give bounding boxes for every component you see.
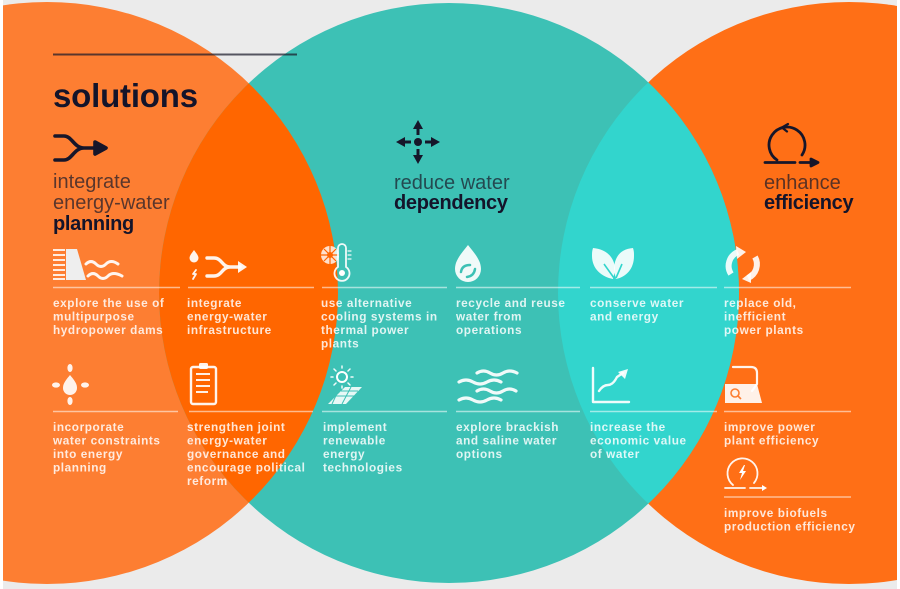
title: solutions: [53, 77, 198, 114]
panel: energy-water infrastructure: energy-water: [187, 310, 267, 324]
icon: merging arrows: [55, 136, 106, 160]
heading: enhance efficiency: efficiency: [764, 192, 854, 214]
panel: renewable energy: implement: [323, 420, 387, 434]
panel: alternative cooling: thermal power: [321, 323, 409, 337]
panel: power plant efficiency: improve power: [724, 420, 815, 434]
heading: enhance efficiency: enhance: [764, 172, 841, 194]
icon: drop, bolt and merging arrows: [190, 250, 247, 279]
panel: joint governance: governance and: [187, 447, 286, 461]
panel: recycle and reuse: water from: [455, 310, 522, 324]
panel: economic value of water: economic value: [590, 434, 687, 448]
heading: reduce water dependency: reduce water: [394, 172, 510, 194]
panel: joint governance: [187, 363, 313, 488]
overlap: left and middle: [159, 83, 338, 503]
panel: brackish and saline water: [456, 371, 580, 461]
panel: brackish and saline water: options: [456, 447, 503, 461]
icon: dam: [53, 249, 122, 280]
panel: conserve water and energy: and energy: [590, 310, 659, 324]
panel: recycle and reuse: operations: [456, 323, 522, 337]
panel: joint governance: encourage political: [187, 460, 306, 474]
panel: conserve water and energy: [590, 248, 717, 324]
panel: alternative cooling: [321, 244, 447, 350]
panel: water constraints: water constraints: [52, 434, 161, 448]
panel: replace old plants: [724, 246, 851, 337]
panel: brackish and saline water: and saline water: [456, 434, 557, 448]
icon: leaves: [592, 248, 634, 279]
heading: reduce water dependency: [394, 172, 510, 214]
panel: hydropower dams: [53, 249, 180, 337]
panel: replace old plants: inefficient: [724, 310, 786, 324]
panel: replace old plants: power plants: [724, 323, 804, 337]
panel: economic value of water: [590, 368, 717, 461]
icon: sun and solar panel: [328, 366, 362, 404]
icon: drop with four points: [52, 364, 89, 405]
panel: joint governance: energy-water: [187, 434, 267, 448]
panel: biofuels production efficiency: [724, 458, 855, 534]
icon: power plant: [725, 367, 762, 403]
panel: renewable energy: [322, 366, 447, 474]
icon: loop arrow: [765, 124, 818, 166]
panel: energy-water infrastructure: integrate: [187, 296, 242, 310]
heading: integrate energy-water planning: integrate: [53, 171, 131, 193]
top rule: [53, 54, 297, 56]
panel: replace old plants: replace old,: [724, 296, 797, 310]
panel: water constraints: incorporate: [53, 420, 124, 434]
panel: renewable energy: technologies: [323, 460, 403, 474]
panel: renewable energy: energy: [323, 447, 365, 461]
panel: energy-water infrastructure: infrastructure: [187, 323, 272, 337]
circle: left: [3, 2, 249, 584]
panel: energy-water infrastructure: [187, 250, 314, 337]
panel: hydropower dams: multipurpose: [53, 310, 135, 324]
panel: hydropower dams: explore the use of: [53, 296, 164, 310]
panel: power plant efficiency: [724, 367, 851, 448]
panel: biofuels production efficiency: production efficiency: [724, 520, 855, 534]
panel: hydropower dams: hydropower dams: [53, 323, 163, 337]
panel: water constraints: [52, 364, 178, 474]
panel: recycle and reuse: [455, 245, 580, 337]
icon: recycle arrows: [729, 246, 757, 283]
heading: integrate energy-water planning: [53, 171, 170, 235]
overlap: middle and right: [558, 82, 739, 504]
panel: joint governance: reform: [187, 474, 228, 488]
heading: integrate energy-water planning: planning: [53, 213, 134, 235]
panel: water constraints: into energy: [53, 447, 123, 461]
panel: joint governance: strengthen joint: [187, 420, 285, 434]
icon: waves: [459, 371, 517, 402]
icon: clipboard: [191, 363, 216, 404]
panel: economic value of water: increase the: [590, 420, 666, 434]
heading: integrate energy-water planning: energy-water: [53, 192, 170, 214]
panel: renewable energy: renewable: [323, 434, 386, 448]
panel: biofuels production efficiency: improve biofuels: [724, 506, 828, 520]
heading: enhance efficiency: [764, 172, 854, 214]
panel: conserve water and energy: conserve water: [590, 296, 684, 310]
icon: four arrows: [396, 120, 440, 164]
circle: middle: [159, 3, 739, 583]
icon: loop with bolt: [725, 458, 767, 491]
panel: power plant efficiency: plant efficiency: [724, 434, 819, 448]
heading: reduce water dependency: dependency: [394, 192, 509, 214]
panel: economic value of water: of water: [590, 447, 640, 461]
circle: right: [648, 2, 897, 584]
panel: recycle and reuse: recycle and reuse: [456, 296, 566, 310]
panel: alternative cooling: cooling systems in: [321, 310, 438, 324]
panel: alternative cooling: use alternative: [321, 296, 412, 310]
icon: line chart: [593, 368, 629, 402]
panel: water constraints: planning: [53, 460, 107, 474]
icon: snowflake and thermometer: [321, 244, 351, 281]
panel: alternative cooling: plants: [321, 336, 359, 350]
icon: recycle drop: [455, 245, 481, 282]
panel: brackish and saline water: explore brackish: [456, 420, 559, 434]
